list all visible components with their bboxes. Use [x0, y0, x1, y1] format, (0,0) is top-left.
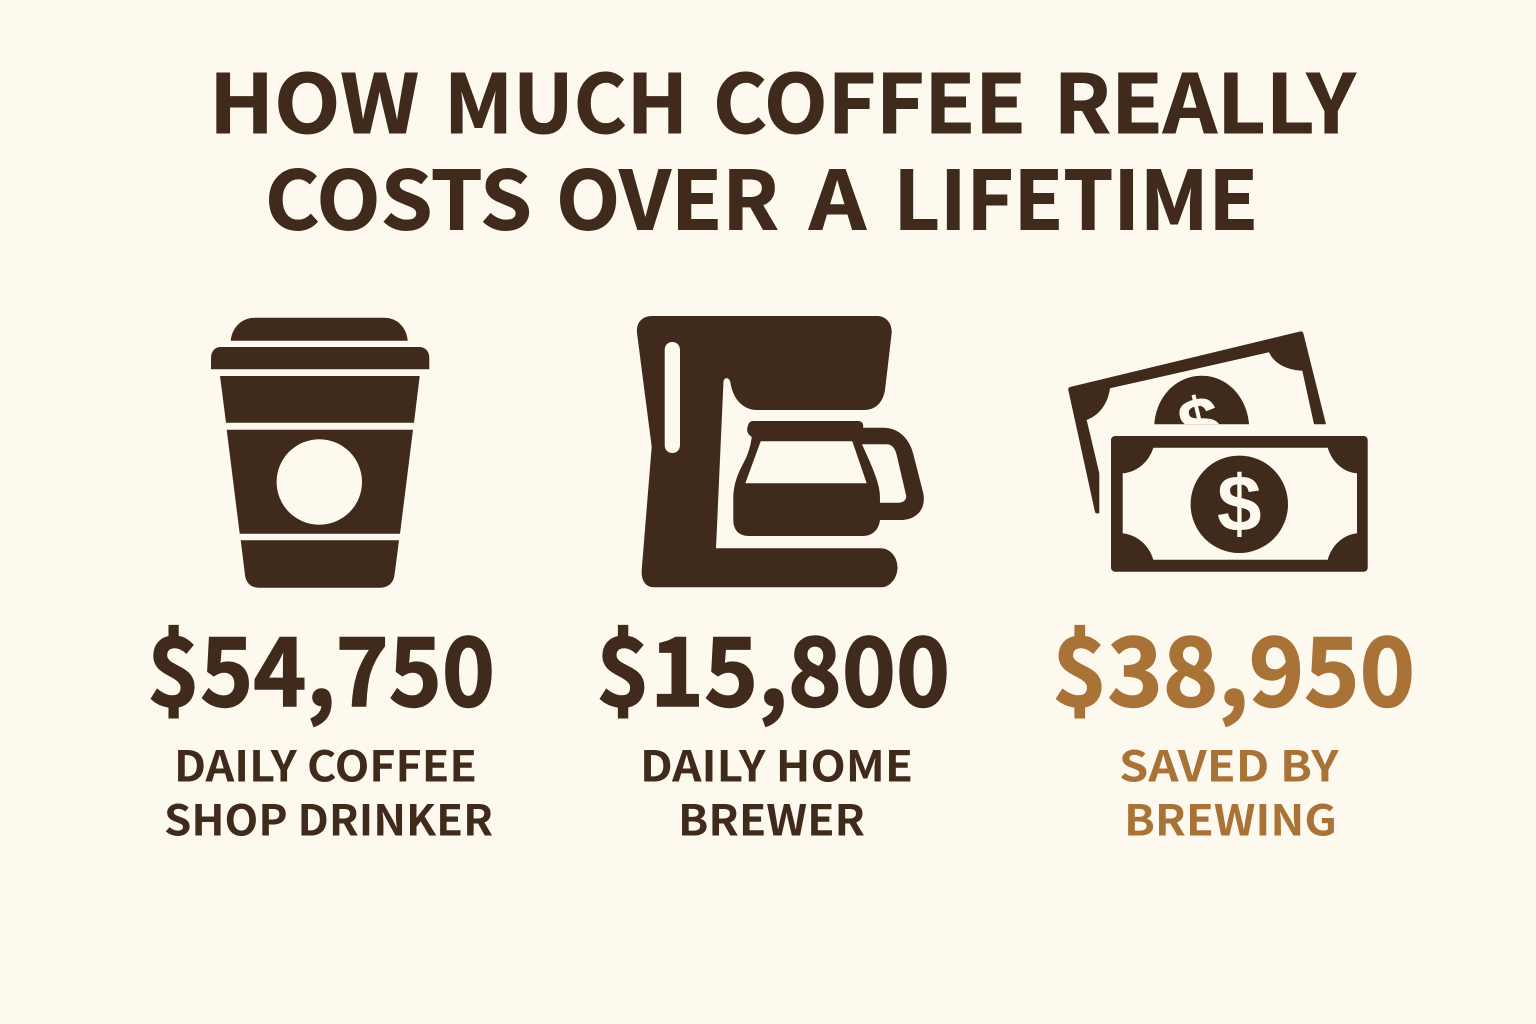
icon: takeaway coffee cup — [211, 318, 429, 588]
title: A — [808, 136, 867, 253]
title: LIFETIME — [894, 136, 1258, 253]
icon: money bills — [1068, 331, 1368, 572]
stat: daily home brewer — [596, 597, 950, 848]
stat: daily home brewer: $15,800 — [596, 597, 950, 734]
icon: money bills: $ — [1171, 378, 1229, 469]
stat: daily coffee shop drinker: $54,750 — [147, 597, 495, 734]
title: MUCH — [444, 40, 688, 157]
title: HOW — [209, 40, 419, 157]
stat: daily coffee shop drinker: SHOP DRINKER — [164, 787, 493, 848]
stat: daily coffee shop drinker: DAILY COFFEE — [174, 734, 477, 795]
stat: saved by brewing — [1052, 597, 1415, 848]
title: COSTS — [265, 136, 532, 253]
title: OVER — [556, 136, 779, 253]
stat: saved by brewing: $38,950 — [1052, 597, 1415, 734]
stat: daily home brewer: BREWER — [678, 787, 865, 848]
stat: saved by brewing: SAVED BY — [1119, 734, 1339, 795]
stat: saved by brewing: BREWING — [1124, 787, 1337, 848]
title — [209, 40, 1357, 253]
icon: money bills: $ — [1217, 459, 1262, 548]
title: REALLY — [1054, 40, 1357, 157]
stat: daily home brewer: DAILY HOME — [640, 734, 913, 795]
title: COFFEE — [713, 40, 1026, 157]
stat: daily coffee shop drinker — [147, 597, 495, 848]
icon: drip coffee maker — [637, 316, 924, 587]
